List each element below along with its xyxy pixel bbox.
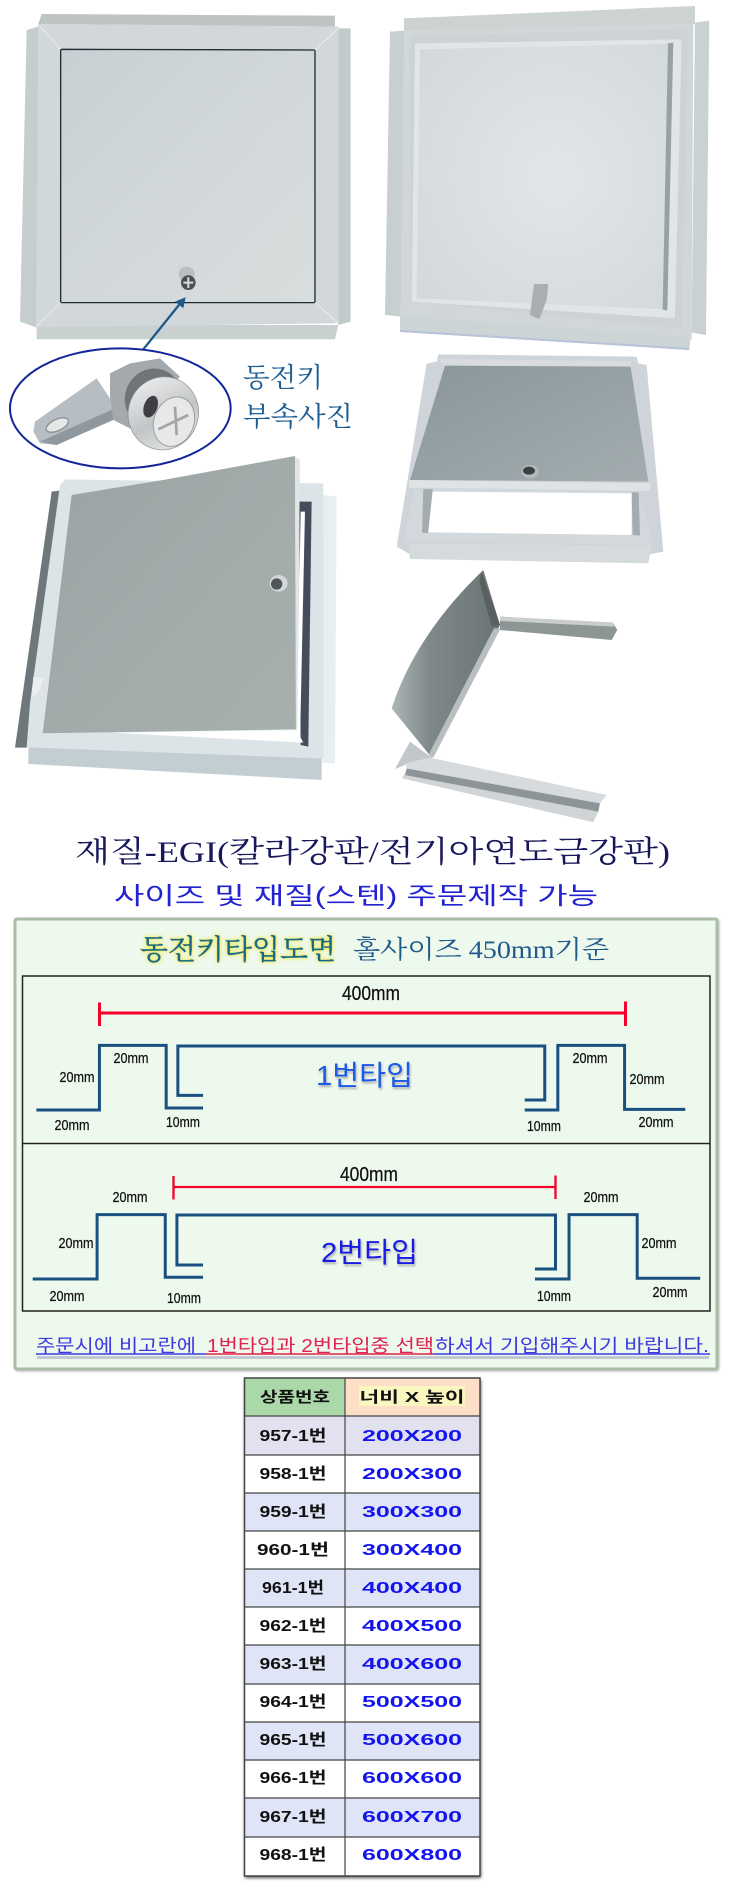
row 961 <box>262 1579 462 1597</box>
row 967: 600X700 <box>362 1809 462 1826</box>
table header: 상품번호 <box>260 1389 330 1406</box>
chart: type 1 profile: 20mm <box>572 1050 608 1067</box>
row 965 <box>260 1731 462 1749</box>
row 960: 960-1번 <box>257 1541 329 1559</box>
row 959 <box>260 1503 462 1521</box>
row 967: 967-1번 <box>260 1808 326 1826</box>
row 962: 400X500 <box>362 1618 462 1635</box>
chart: type 2 profile: 20mm <box>584 1189 618 1206</box>
row 967 <box>260 1808 462 1826</box>
row 957 <box>260 1427 462 1445</box>
row 968: 968-1번 <box>260 1846 326 1864</box>
photo: door removed, top view <box>397 354 663 563</box>
row 958 <box>260 1465 462 1483</box>
row 960 <box>257 1541 462 1559</box>
chart: type 1 profile: 20mm <box>630 1071 664 1088</box>
row 965: 500X600 <box>362 1732 462 1749</box>
chart: type 2 profile: 20mm <box>642 1235 676 1252</box>
chart: type 1 profile: 10mm <box>166 1114 200 1131</box>
arrow: lock pointer <box>143 297 186 349</box>
panel: drawing types <box>15 919 717 1369</box>
notice: order instruction <box>36 1336 710 1359</box>
row 965: 965-1번 <box>260 1731 326 1749</box>
photo: closed access door, front <box>20 14 351 339</box>
label: lock caption: 부속사진 <box>243 402 353 432</box>
row 960: 300X400 <box>362 1542 462 1559</box>
drawing box <box>22 976 710 1311</box>
title: material: 재질-EGI(칼라강판/전기아연도금강판) <box>75 836 670 869</box>
row 958: 958-1번 <box>260 1465 326 1483</box>
table header: 너비 X 높이 <box>360 1389 464 1406</box>
row 963 <box>260 1655 462 1673</box>
subtitle: custom order: 사이즈 및 재질(스텐) 주문제작 가능 <box>114 883 598 910</box>
row 962: 962-1번 <box>260 1617 326 1635</box>
row 968: 600X800 <box>362 1847 462 1864</box>
chart: type 2 profile: 400mm <box>340 1164 398 1186</box>
row 966: 966-1번 <box>260 1769 326 1787</box>
row 964: 500X500 <box>362 1694 462 1711</box>
chart: type 1 profile: 400mm <box>342 983 400 1005</box>
row 957: 200X200 <box>362 1428 462 1445</box>
notice: order instruction: 하셔서 기입해주시기 바랍니다. <box>435 1336 709 1356</box>
notice: order instruction: 1번타입과 2번타입중 선택 <box>207 1336 434 1356</box>
table: sizes <box>244 1378 481 1878</box>
chart: type 2 profile: 20mm <box>112 1189 148 1206</box>
row bands <box>244 1378 480 1876</box>
label: lock caption: 동전키 <box>243 363 323 393</box>
row 966: 600X600 <box>362 1770 462 1787</box>
row 968 <box>260 1846 462 1864</box>
chart: type 1 profile: 1번타입 <box>316 1060 413 1091</box>
row 962 <box>260 1617 462 1635</box>
row 961: 400X400 <box>362 1580 462 1597</box>
chart: type 1 profile <box>36 983 685 1135</box>
row 957: 957-1번 <box>260 1427 326 1445</box>
icon: lock photo callout <box>10 348 231 468</box>
heading: drawing: 홀사이즈 450mm기준 <box>353 936 609 964</box>
heading: drawing <box>140 934 609 966</box>
chart: type 2 profile: 10mm <box>167 1290 201 1307</box>
photo: door side view <box>392 570 617 822</box>
photo: door hanging open <box>15 456 337 780</box>
chart: type 2 profile: 10mm <box>537 1288 571 1305</box>
chart: type 2 profile: 20mm <box>58 1235 94 1252</box>
chart: type 2 profile: 20mm <box>652 1284 688 1301</box>
chart: type 2 profile: 20mm <box>50 1288 84 1305</box>
chart: type 1 profile: 20mm <box>60 1069 94 1086</box>
heading: drawing: 동전키타입도면 <box>140 934 336 966</box>
row 958: 200X300 <box>362 1466 462 1483</box>
table header <box>244 1378 480 1416</box>
row 961: 961-1번 <box>262 1579 324 1597</box>
row 966 <box>260 1769 462 1787</box>
row 964: 964-1번 <box>260 1693 326 1711</box>
chart: type 1 profile: 20mm <box>54 1117 90 1134</box>
row 964 <box>260 1693 462 1711</box>
row 963: 963-1번 <box>260 1655 326 1673</box>
photo: access door, back <box>385 6 709 350</box>
row 959: 300X300 <box>362 1504 462 1521</box>
chart: type 2 profile <box>33 1164 700 1307</box>
row 959: 959-1번 <box>260 1503 326 1521</box>
chart: type 1 profile: 20mm <box>114 1050 148 1067</box>
chart: type 1 profile: 10mm <box>527 1118 561 1135</box>
chart: type 1 profile: 20mm <box>638 1114 674 1131</box>
row 963: 400X600 <box>362 1656 462 1673</box>
label: lock caption <box>243 363 353 432</box>
chart: type 2 profile: 2번타입 <box>321 1237 418 1268</box>
notice: order instruction: 주문시에 비고란에 <box>36 1336 196 1356</box>
